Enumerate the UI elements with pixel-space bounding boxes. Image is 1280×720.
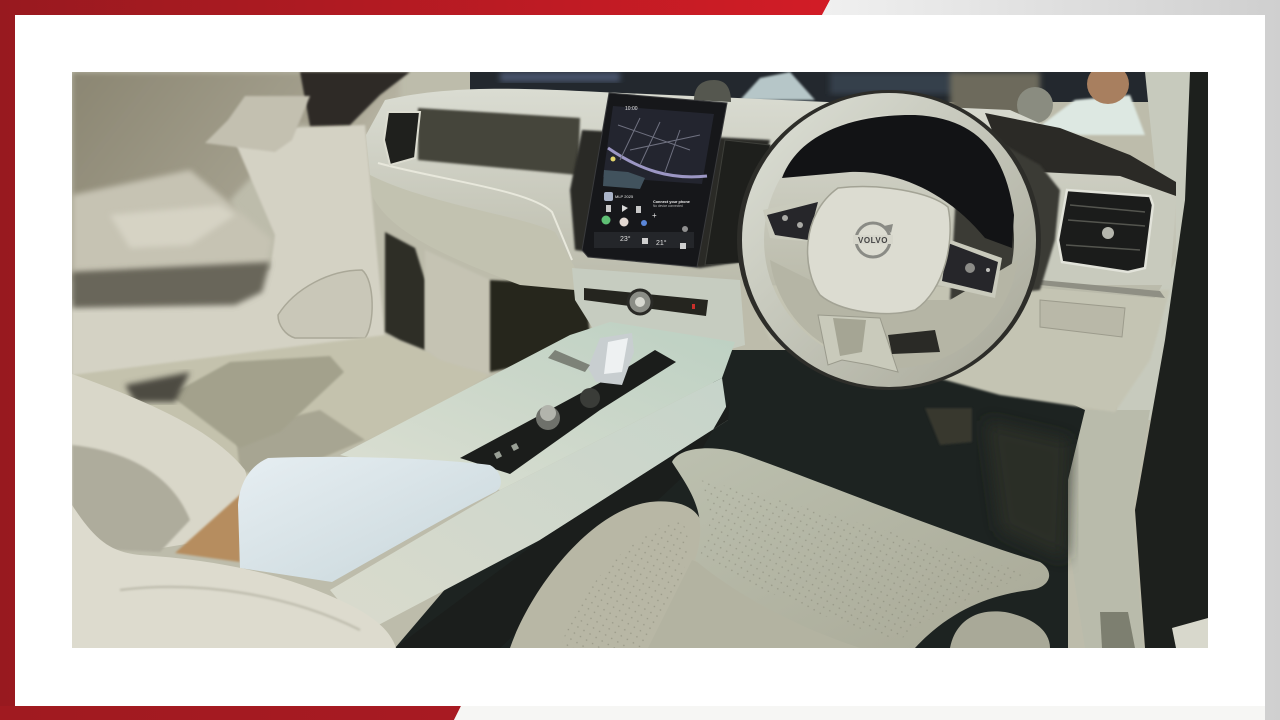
dashboard lower left panel (370, 175, 575, 290)
dark dash inlay (418, 108, 580, 175)
instrument cluster (782, 115, 1014, 248)
door pocket (72, 262, 270, 308)
windshield with people (470, 72, 1160, 123)
frame: bottom pale band (454, 706, 1265, 720)
driver seat cushion (672, 448, 1049, 648)
dark door gap (385, 232, 425, 350)
dark door edge right (1135, 72, 1208, 648)
door handle light (205, 96, 310, 152)
photo: car interior (72, 64, 1208, 648)
frame: bottom red band (0, 706, 461, 720)
photo base (72, 72, 1208, 648)
passenger seat base (72, 505, 396, 648)
glove box button (1040, 300, 1125, 337)
seat lower pad (648, 560, 905, 648)
volvo badge (853, 223, 893, 257)
dashboard top (366, 89, 1176, 298)
pedals (925, 408, 972, 445)
connect phone tile (652, 200, 690, 218)
passenger floor and seat mat (74, 335, 385, 473)
dash chrome strip right (1040, 280, 1165, 298)
light door pillar (424, 274, 488, 372)
door top dark trim (300, 72, 410, 126)
connect phone tile: + (652, 211, 657, 220)
left spoke buttons (763, 197, 820, 242)
status time: 10:00 (625, 106, 638, 112)
passenger seat back upper (72, 374, 247, 550)
climate row (594, 232, 694, 249)
door lower panel (72, 125, 385, 382)
roof knob behind screen (694, 80, 731, 102)
footwell dark area (395, 350, 1085, 648)
steering wheel (740, 93, 1038, 387)
media tile (604, 192, 641, 213)
lower dash right (942, 291, 1168, 411)
connect phone tile: No device connected (653, 204, 683, 208)
centre console top (340, 322, 735, 490)
steering column behind wheel (950, 120, 1060, 300)
map display (603, 106, 714, 189)
driver seat bolster (510, 501, 704, 648)
dark under console (395, 400, 730, 648)
frame: top and right grey band (822, 0, 1280, 720)
door speaker (278, 270, 372, 338)
volvo badge: VOLVO (858, 236, 888, 245)
footwell mat shade (985, 420, 1070, 560)
right centre vent (705, 140, 770, 265)
sill vent (1100, 612, 1135, 648)
media tile: MLP 2025 (615, 194, 634, 199)
centre control strip (584, 288, 708, 316)
right sill (1115, 410, 1150, 420)
lower wheel dark gap (888, 330, 940, 354)
centre stack surround (570, 130, 770, 268)
seat shading (120, 587, 360, 630)
wheel opening lower (770, 260, 1018, 368)
lower spoke (818, 315, 898, 372)
instrument cluster hood (985, 113, 1176, 196)
light floor patch bottom right (1172, 618, 1208, 648)
wheel rim (740, 93, 1038, 387)
tan accent by armrest (175, 493, 242, 562)
climate row: 23° (620, 235, 631, 243)
left air vent (384, 112, 420, 165)
dash chrome line (378, 163, 572, 260)
bolster perforation (560, 520, 688, 648)
dark passenger footwell (490, 280, 590, 372)
climate row: 21° (656, 239, 667, 247)
frame: top and left red band (0, 0, 830, 720)
console side strip (330, 378, 728, 632)
passenger seat inner (72, 445, 190, 552)
connect phone tile: Connect your phone (653, 200, 690, 204)
person in the background (1042, 72, 1146, 136)
seat right pad (950, 611, 1050, 648)
vent right (1040, 190, 1176, 285)
console recess dark panel (460, 350, 676, 474)
cushion perforation (700, 480, 1035, 640)
lower spoke opening (833, 318, 866, 356)
infotainment screen (582, 93, 727, 267)
a-pillar light (1115, 72, 1190, 420)
app icons (602, 216, 688, 232)
right spoke buttons (938, 238, 1002, 298)
centre lower panel (572, 268, 745, 348)
crystal gear selector (548, 333, 634, 385)
door upper panel (72, 72, 400, 280)
armrest (238, 457, 501, 582)
wheel hub airbag (808, 187, 950, 314)
